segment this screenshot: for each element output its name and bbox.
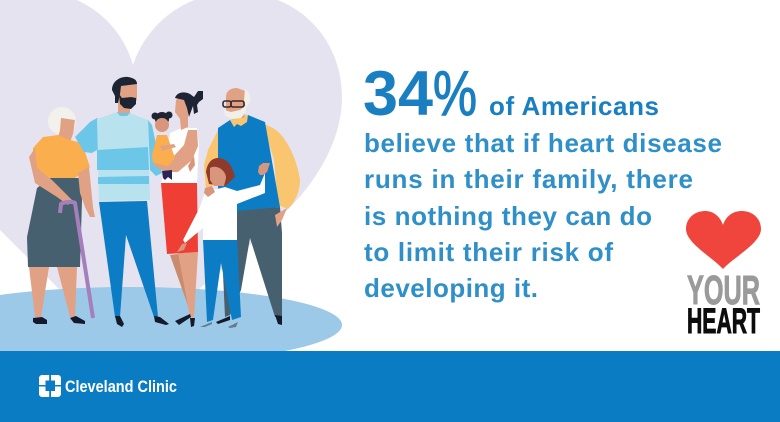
logo: Cleveland Clinic xyxy=(39,375,177,397)
body text: believe that if heart disease xyxy=(364,128,722,158)
figure: mother holding toddler xyxy=(152,91,203,327)
big number 34: 34 xyxy=(363,59,433,129)
figure: grandmother xyxy=(27,107,95,324)
family illustration xyxy=(27,77,300,328)
body text: to limit their risk of xyxy=(364,237,613,267)
figure: father xyxy=(75,77,169,327)
logo: Cleveland Clinic: Cleveland Clinic xyxy=(65,378,177,396)
headline statistic xyxy=(363,59,722,303)
icon: Cleveland Clinic cross xyxy=(39,375,61,397)
body text xyxy=(364,91,722,303)
figure: grandfather xyxy=(204,88,300,325)
body text: of Americans xyxy=(489,91,659,121)
icon: red heart xyxy=(686,211,761,269)
cane xyxy=(60,202,93,318)
figure: child xyxy=(177,158,270,328)
lavender background heart xyxy=(0,0,342,352)
body text: is nothing they can do xyxy=(364,201,652,231)
light blue ground ellipse xyxy=(0,287,342,363)
percent sign: % xyxy=(433,59,477,129)
body text: runs in their family, there xyxy=(364,164,693,194)
toddler xyxy=(152,112,176,180)
body text: developing it. xyxy=(364,273,538,303)
blue footer band xyxy=(0,351,780,422)
logo: Love Your Heart xyxy=(686,211,761,341)
